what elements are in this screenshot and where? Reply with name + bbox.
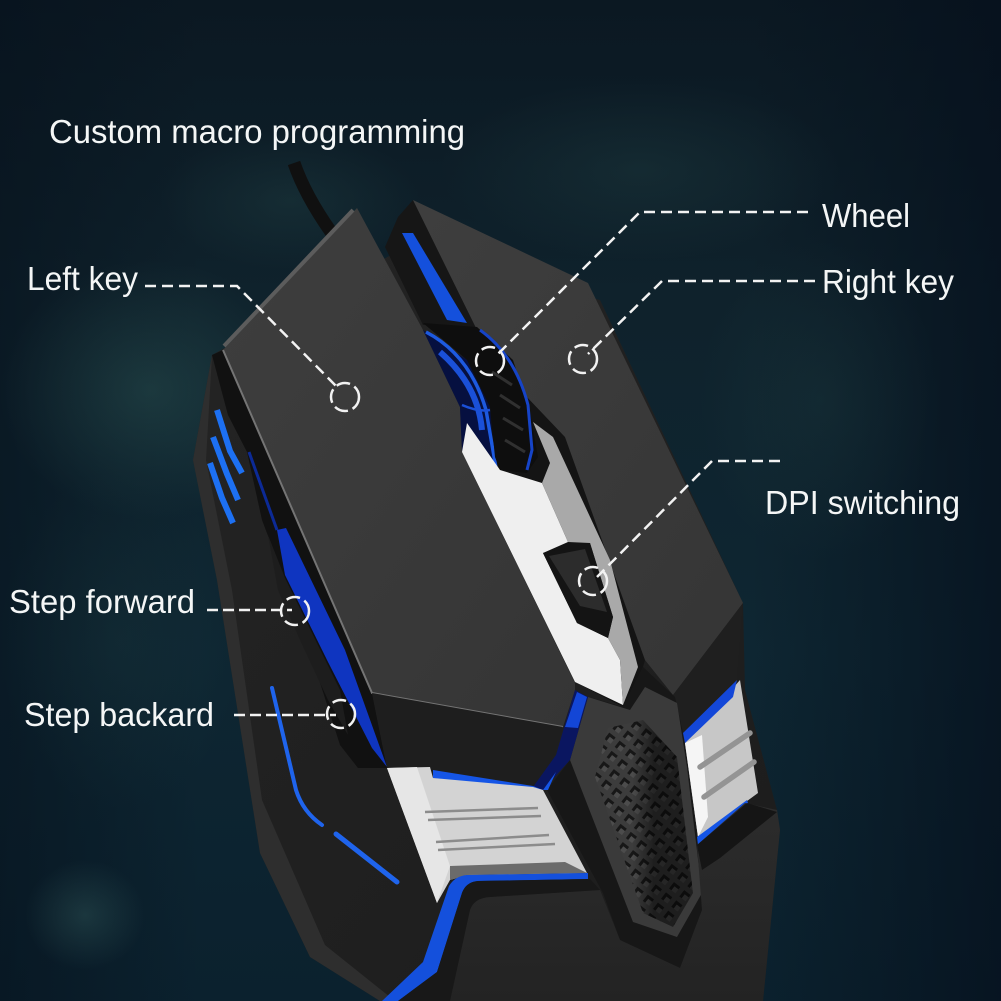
callout: wheel (476, 212, 808, 375)
side blue glow channel (249, 452, 387, 767)
cable (294, 163, 331, 232)
label: Right key: Right key (822, 263, 954, 300)
callout: step forward (207, 597, 309, 625)
lower left panel (372, 693, 563, 790)
wheel hollow (423, 330, 495, 470)
wheel tyre (423, 323, 538, 473)
scroll wheel (423, 323, 538, 473)
base blue light strip (382, 873, 588, 1001)
left side inner shadow channel (212, 350, 387, 768)
DPI button (543, 543, 613, 638)
curved LED strips (272, 688, 397, 882)
label: Left key: Left key (27, 260, 138, 297)
blue link between panels (533, 690, 588, 790)
right key channel (385, 200, 477, 327)
label: DPI switching: DPI switching (765, 484, 960, 521)
black trim beside centre plate (462, 330, 645, 707)
left key edge highlights (223, 210, 563, 727)
right key (413, 200, 743, 695)
left key (223, 208, 575, 727)
centre mesh panel (547, 667, 702, 968)
left side outer band (193, 355, 395, 1001)
mouse body shell (193, 250, 780, 1001)
right silver grip (683, 680, 758, 845)
mouse illustration (193, 163, 780, 1001)
callout: DPI switching (579, 461, 780, 595)
label: Step forward: Step forward (9, 583, 195, 620)
callout: left key (145, 286, 359, 411)
side buttons (268, 535, 348, 735)
label: Step backard: Step backard (24, 696, 214, 733)
callout lines and target rings (145, 212, 815, 728)
right key lower side (673, 603, 743, 733)
left silver grip (387, 767, 587, 903)
centre silver plate (462, 422, 638, 705)
side LED bars (210, 410, 242, 523)
label: Wheel: Wheel (822, 197, 910, 234)
palm rest (400, 803, 780, 1001)
callout: right key (569, 281, 815, 373)
label: Custom macro programming: Custom macro programming (49, 113, 465, 150)
callout: step backard (234, 700, 355, 728)
top blue LED (402, 233, 467, 323)
